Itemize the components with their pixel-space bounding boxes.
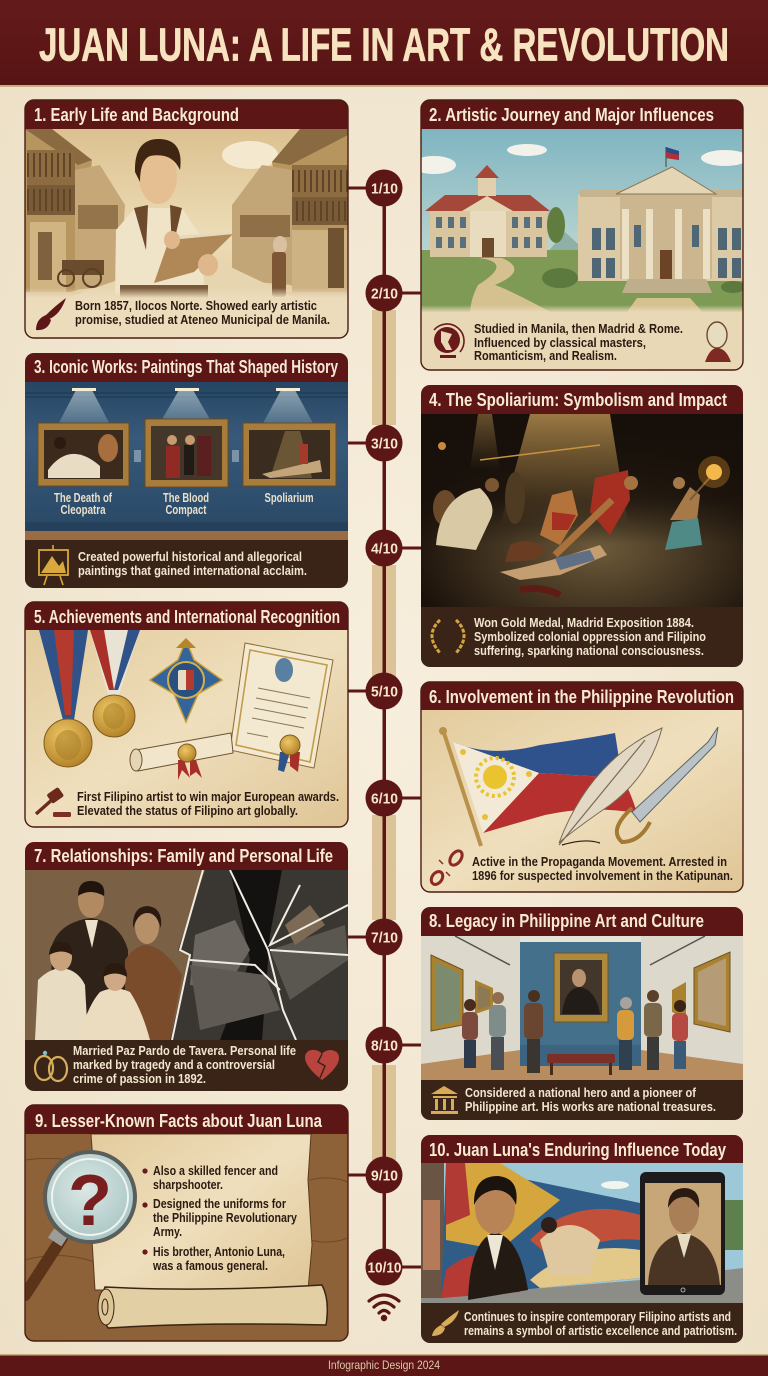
description text: Won Gold Medal, Madrid Exposition 1884. bbox=[474, 615, 694, 630]
panel 5: achievements bbox=[25, 602, 348, 827]
description text bbox=[472, 854, 733, 883]
timeline node 2: 2/10 bbox=[371, 286, 398, 302]
panel 4: the Spoliarium bbox=[421, 385, 743, 667]
illustration: the Spoliarium scene bbox=[421, 414, 743, 667]
icon: paintbrush bbox=[432, 1310, 459, 1336]
description text: Born 1857, Ilocos Norte. Showed early artistic bbox=[75, 298, 317, 313]
description text bbox=[474, 321, 683, 363]
star badge bbox=[150, 638, 222, 722]
description text: Elevated the status of Filipino art globally. bbox=[77, 803, 298, 818]
description text bbox=[75, 298, 330, 327]
heading: 3. Iconic Works: Paintings That Shaped History bbox=[34, 357, 338, 377]
fact list: was a famous general. bbox=[152, 1258, 268, 1273]
gallery visitors bbox=[462, 990, 688, 1073]
icon: wifi signal bbox=[369, 1295, 399, 1320]
heading bbox=[421, 907, 743, 936]
description text: Studied in Manila, then Madrid & Rome. bbox=[474, 321, 683, 336]
icon: museum building bbox=[431, 1086, 458, 1114]
illustration: medals, badge and certificate bbox=[25, 630, 348, 827]
fact list: Army. bbox=[153, 1224, 182, 1239]
timeline node 7 bbox=[366, 918, 402, 956]
description text: Considered a national hero and a pioneer of bbox=[465, 1085, 697, 1100]
fact list: Designed the uniforms for bbox=[153, 1196, 286, 1211]
heading bbox=[421, 682, 743, 710]
description text: Romanticism, and Realism. bbox=[474, 348, 617, 363]
magnifying glass bbox=[25, 1152, 135, 1295]
timeline node 9 bbox=[366, 1156, 402, 1194]
heading bbox=[421, 385, 743, 414]
icon: broken chain bbox=[429, 849, 465, 887]
painting labels: Cleopatra bbox=[60, 503, 106, 517]
panel 3: iconic works bbox=[25, 353, 348, 588]
panel border bbox=[25, 100, 348, 338]
heading bbox=[25, 602, 348, 630]
illustration: art museum gallery bbox=[421, 936, 743, 1120]
heading bbox=[25, 353, 348, 382]
panel 1: early life bbox=[25, 100, 348, 338]
icon: gold laurel wreath bbox=[432, 620, 464, 653]
panel 7: family and personal life bbox=[25, 842, 348, 1091]
panel 2: artistic journey bbox=[412, 100, 749, 370]
panel border bbox=[421, 682, 743, 892]
icon: easel with landscape bbox=[39, 545, 68, 585]
icon: paintbrush bbox=[36, 298, 66, 330]
description text: paintings that gained international acclaim. bbox=[78, 563, 307, 578]
gallery paintings bbox=[431, 952, 730, 1032]
illustration: Philippine flag, quill and sword bbox=[421, 710, 743, 892]
icon: broken heart bbox=[305, 1050, 339, 1080]
painting: The Blood Compact bbox=[145, 419, 228, 487]
timeline node 8: 8/10 bbox=[371, 1038, 398, 1054]
timeline node 5 bbox=[366, 672, 402, 710]
panel border bbox=[25, 602, 348, 827]
description text bbox=[78, 549, 307, 578]
timeline node 10 bbox=[366, 1248, 402, 1286]
description text bbox=[73, 1043, 296, 1086]
description text: Symbolized colonial oppression and Filipino bbox=[474, 629, 706, 644]
illustration: parchment on wood with magnifying glass bbox=[25, 1134, 348, 1341]
timeline node 8 bbox=[366, 1026, 402, 1064]
icon: globe bbox=[434, 324, 464, 358]
heading: 5. Achievements and International Recognition bbox=[34, 607, 340, 627]
tablet bbox=[640, 1172, 725, 1295]
heading bbox=[25, 1105, 348, 1134]
painting labels: Compact bbox=[166, 503, 207, 517]
painting: Spoliarium bbox=[243, 423, 336, 486]
description text: marked by tragedy and a controversial bbox=[73, 1057, 275, 1072]
mural bbox=[441, 1163, 640, 1300]
footer bbox=[0, 1354, 768, 1376]
timeline node 5: 5/10 bbox=[371, 684, 398, 700]
fact list: Also a skilled fencer and bbox=[153, 1163, 278, 1178]
description text: Created powerful historical and allegorical bbox=[78, 549, 302, 564]
fact list: sharpshooter. bbox=[153, 1177, 223, 1192]
icon: gavel bbox=[36, 787, 71, 817]
heading bbox=[421, 1135, 743, 1163]
panel 9: lesser-known facts bbox=[25, 1105, 348, 1341]
central timeline bbox=[348, 170, 421, 1320]
description text bbox=[474, 615, 706, 658]
Philippine flag bbox=[439, 727, 637, 846]
description text: promise, studied at Ateneo Municipal de Manila. bbox=[75, 312, 330, 327]
painting labels bbox=[54, 491, 314, 517]
panel border bbox=[421, 100, 743, 370]
sword bbox=[617, 727, 718, 842]
heading bbox=[25, 842, 348, 870]
timeline node 4: 4/10 bbox=[371, 540, 398, 558]
title banner bbox=[0, 0, 768, 87]
timeline node 6: 6/10 bbox=[371, 790, 398, 808]
timeline node 1 bbox=[366, 170, 402, 206]
panel 8: legacy bbox=[421, 907, 743, 1120]
description text bbox=[77, 789, 339, 818]
timeline node 2 bbox=[366, 274, 402, 312]
description text: Active in the Propaganda Movement. Arrested in bbox=[472, 854, 727, 869]
timeline node 4 bbox=[366, 530, 402, 566]
shattered painting bbox=[170, 870, 348, 1040]
timeline node 1: 1/10 bbox=[371, 180, 398, 198]
icon: classical bust bbox=[705, 322, 731, 362]
heading: 9. Lesser-Known Facts about Juan Luna bbox=[35, 1111, 323, 1131]
painting labels: Spoliarium bbox=[264, 491, 314, 505]
illustration: boy sketching in a colonial street bbox=[25, 129, 348, 338]
illustration: academy buildings in Manila and Madrid bbox=[412, 129, 749, 370]
description text: suffering, sparking national consciousness. bbox=[474, 643, 704, 658]
painting labels: The Blood bbox=[163, 491, 209, 505]
heading: 7. Relationships: Family and Personal Life bbox=[34, 846, 333, 866]
heading: 8. Legacy in Philippine Art and Culture bbox=[429, 911, 704, 931]
medal ribbons and gold medals bbox=[39, 630, 140, 767]
heading bbox=[421, 100, 743, 129]
heading: 1. Early Life and Background bbox=[34, 105, 239, 125]
panel 6: revolution bbox=[421, 682, 743, 892]
magnifying glass: ? bbox=[68, 1161, 112, 1241]
certificate bbox=[230, 643, 333, 768]
description text: First Filipino artist to win major European awards. bbox=[77, 789, 339, 804]
description text: Philippine art. His works are national treasures. bbox=[465, 1099, 716, 1114]
rolled scroll bbox=[98, 1285, 327, 1328]
quill bbox=[559, 728, 662, 845]
illustration: street mural and tablet bbox=[421, 1163, 743, 1343]
fact list: His brother, Antonio Luna, bbox=[153, 1244, 285, 1259]
description text bbox=[464, 1309, 737, 1338]
timeline node 9: 9/10 bbox=[371, 1168, 398, 1184]
heading bbox=[25, 100, 348, 129]
timeline node 10: 10/10 bbox=[368, 1260, 402, 1276]
timeline node 3 bbox=[366, 424, 402, 462]
bench bbox=[547, 1054, 615, 1075]
painting: The Death of Cleopatra bbox=[38, 423, 129, 486]
description text bbox=[465, 1085, 716, 1114]
panel 10: enduring influence bbox=[421, 1135, 743, 1343]
fact list: the Philippine Revolutionary bbox=[153, 1210, 298, 1225]
heading: 2. Artistic Journey and Major Influences bbox=[429, 105, 714, 125]
fact list bbox=[142, 1163, 298, 1273]
scroll and rosettes bbox=[130, 733, 300, 780]
icon: wedding rings bbox=[35, 1051, 67, 1081]
description text: Influenced by classical masters, bbox=[474, 335, 646, 350]
timeline node 3: 3/10 bbox=[371, 436, 398, 452]
description text: crime of passion in 1892. bbox=[73, 1071, 206, 1086]
timeline node 6 bbox=[366, 780, 402, 816]
footer: Infographic Design 2024 bbox=[328, 1358, 440, 1372]
timeline node 7: 7/10 bbox=[371, 930, 398, 946]
illustration: gallery wall with three paintings bbox=[25, 382, 348, 588]
family portrait bbox=[35, 881, 182, 1040]
painting labels: The Death of bbox=[54, 491, 113, 505]
illustration: family portrait and shattered image bbox=[25, 870, 348, 1091]
panel border bbox=[25, 1105, 348, 1341]
description text: Married Paz Pardo de Tavera. Personal life bbox=[73, 1043, 296, 1058]
